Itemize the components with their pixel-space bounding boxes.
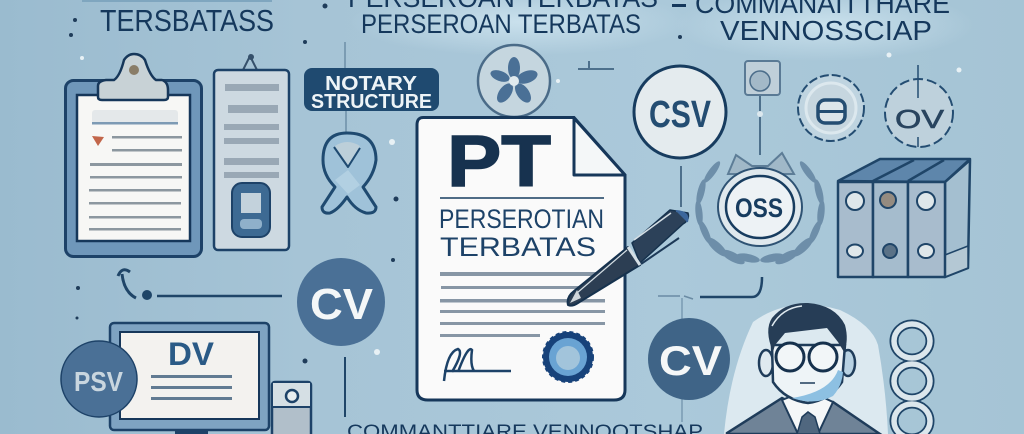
icon: small box [745, 61, 780, 95]
badge: CSV [634, 66, 726, 158]
emblem: OSS: OSS [735, 193, 783, 223]
screen text lines [151, 375, 232, 400]
connector: lower left [118, 270, 345, 417]
decorative specks [69, 4, 962, 364]
figure: person [724, 303, 888, 434]
label: notary structure: NOTARY [325, 73, 418, 95]
emblem: OSS [694, 153, 826, 267]
document subtitle: PERSEROTIAN [439, 204, 604, 234]
screen title: DV: DV [168, 336, 215, 372]
badge: CV right: CV [659, 337, 722, 384]
icon: clipboard [66, 54, 202, 256]
label: notary structure [304, 42, 439, 132]
heading: top right [672, 0, 950, 46]
badge: gear [798, 75, 864, 141]
badge: CV left: CV [310, 280, 374, 329]
badge: OV [885, 65, 953, 147]
icon: pen [568, 210, 688, 306]
heading: centre: PERSEROAN TERBATAS [361, 9, 641, 39]
document subtitle: TERBATAS [440, 232, 596, 262]
connector: lower right [658, 277, 762, 422]
label: notary structure: STRUCTURE [311, 91, 432, 113]
badge: OV: OV [895, 104, 945, 134]
badge: CV right [648, 318, 730, 400]
document: PT [417, 117, 625, 400]
signature [444, 349, 511, 381]
document text lines [440, 272, 605, 337]
icon: ribbon [322, 133, 376, 213]
document subtitle [439, 204, 604, 262]
icon: monitor [110, 323, 269, 434]
badge: CSV: CSV [649, 94, 712, 136]
badge: PSV [61, 341, 137, 417]
icon: binders [838, 159, 970, 277]
badge: CV left [297, 258, 385, 346]
icon: chain [894, 324, 930, 434]
document title: PT: PT [447, 122, 551, 202]
badge: PSV: PSV [74, 366, 123, 397]
icon: tall form with device [214, 54, 289, 250]
heading: top left: TERSBATASS [100, 3, 274, 38]
connector: CSV to emblem [578, 61, 763, 207]
heading: top right: VENNOSSCIAP [720, 15, 932, 46]
icon: small device [272, 382, 311, 434]
seal [543, 332, 593, 382]
icon: top circle emblem [478, 45, 550, 117]
